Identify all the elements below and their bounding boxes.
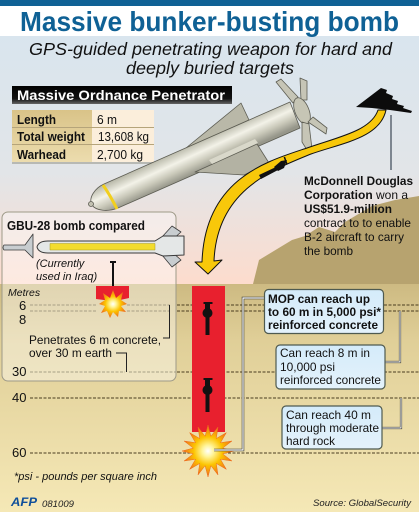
callout: 40 m reach: through moderate bbox=[286, 421, 379, 435]
text: McDonnell Douglas contract: the bomb bbox=[304, 244, 353, 258]
specification table: 6 m bbox=[97, 112, 117, 127]
text: McDonnell Douglas contract: McDonnell Douglas bbox=[304, 174, 413, 188]
icon: descending bomb upper bbox=[202, 302, 212, 335]
subtitle: deeply buried targets bbox=[126, 58, 294, 78]
specification table: 2,700 kg bbox=[97, 147, 143, 162]
subtitle bbox=[29, 39, 393, 78]
connector: MOP bbox=[214, 298, 265, 450]
source: Source: GlobalSecurity bbox=[313, 498, 412, 509]
connector: 8 m bbox=[385, 311, 400, 362]
callout: 8 m reach bbox=[276, 345, 385, 389]
callout: 40 m reach: hard rock bbox=[286, 434, 336, 448]
connector lines bbox=[116, 305, 170, 372]
specification table: 13,608 kg bbox=[98, 129, 149, 144]
title: Massive bunker-busting bomb bbox=[20, 6, 399, 37]
table heading band: Massive Ordnance Penetrator bbox=[17, 88, 226, 103]
icon: B-2 stealth bomber bbox=[356, 88, 412, 113]
date code: 081009 bbox=[42, 499, 75, 510]
red crater bbox=[96, 286, 129, 300]
depth labels lower bbox=[12, 390, 26, 460]
callout: MOP reach: reinforced concrete bbox=[268, 318, 378, 332]
text: McDonnell Douglas contract: US$51.9-million bbox=[304, 202, 392, 216]
depth labels lower: 60 bbox=[12, 445, 26, 460]
depth labels: 6 bbox=[19, 298, 26, 313]
rear fin upper left bbox=[276, 79, 298, 103]
icon: GBU-28 bomb bbox=[3, 226, 184, 267]
text: McDonnell Douglas contract: B-2 aircraft to carry bbox=[304, 230, 404, 244]
text: penetrates 6 m concrete: Penetrates 6 m concrete, bbox=[29, 333, 161, 347]
text: McDonnell Douglas contract bbox=[304, 174, 413, 258]
GBU dashed lines bbox=[30, 305, 176, 372]
depth labels bbox=[12, 298, 26, 379]
icon: falling GBU-28 bbox=[110, 261, 116, 286]
note: currently used in Iraq: used in Iraq) bbox=[36, 271, 97, 283]
depth labels: 30 bbox=[12, 364, 26, 379]
tail ring bbox=[290, 95, 314, 127]
note: currently used in Iraq bbox=[36, 258, 97, 283]
panel heading: GBU-28 bomb compared bbox=[7, 218, 145, 233]
wing stripe bbox=[209, 139, 258, 164]
text: penetrates 6 m concrete: over 30 m earth bbox=[29, 346, 112, 360]
callout: MOP reach bbox=[264, 290, 384, 334]
connector: 40 m bbox=[382, 398, 401, 428]
callout: 40 m reach bbox=[282, 406, 382, 449]
bomb body bbox=[91, 102, 300, 210]
depth labels: 8 bbox=[19, 312, 26, 327]
callout: 8 m reach: Can reach 8 m in bbox=[280, 346, 370, 360]
rear fin top bbox=[300, 78, 307, 100]
icon: descending bomb lower bbox=[202, 378, 212, 412]
upper wing bbox=[186, 103, 249, 148]
callout: MOP reach: MOP can reach up bbox=[268, 292, 370, 306]
footnote: *psi - pounds per square inch bbox=[14, 471, 157, 483]
red penetration column bbox=[192, 286, 225, 432]
subtitle: GPS-guided penetrating weapon for hard and bbox=[29, 39, 393, 59]
icon: GBU explosion bbox=[99, 290, 127, 318]
callout: 8 m reach: reinforced concrete bbox=[280, 373, 381, 387]
lower wing bbox=[195, 144, 269, 175]
arrow: yellow flight path bbox=[195, 110, 386, 274]
logo: AFP: AFP bbox=[10, 495, 38, 509]
yellow nose band bbox=[103, 185, 117, 209]
nose tip bbox=[88, 202, 94, 206]
rear fin right bbox=[308, 117, 327, 134]
specification table: Total weight bbox=[17, 129, 86, 144]
mountains bbox=[253, 196, 419, 284]
top colour bar bbox=[0, 0, 419, 6]
depth lines bbox=[30, 305, 419, 453]
pointer line bbox=[390, 115, 392, 170]
specification table: Length bbox=[17, 112, 56, 127]
icon: MOP bomb illustration bbox=[88, 78, 327, 210]
rear fin lower bbox=[302, 122, 312, 150]
text: McDonnell Douglas contract: Corporation won a bbox=[304, 188, 408, 202]
specification table: Warhead bbox=[17, 147, 66, 162]
callout: 8 m reach: 10,000 psi bbox=[280, 360, 335, 374]
panel: GBU-28 comparison bbox=[2, 212, 184, 381]
depth labels lower: 40 bbox=[12, 390, 26, 405]
icon: MOP explosion bbox=[182, 425, 234, 477]
scale label: Metres bbox=[8, 287, 41, 299]
callout: 40 m reach: Can reach 40 m bbox=[286, 408, 371, 422]
specification table bbox=[12, 86, 232, 164]
note: currently used in Iraq: (Currently bbox=[36, 258, 86, 270]
sky background bbox=[0, 36, 419, 284]
icon: bomb in flight bbox=[259, 157, 288, 179]
text: penetrates 6 m concrete bbox=[29, 333, 161, 360]
text: McDonnell Douglas contract: contract to to enable bbox=[304, 216, 411, 230]
ground bbox=[0, 284, 419, 512]
callout: MOP reach: to 60 m in 5,000 psi* bbox=[268, 305, 381, 319]
